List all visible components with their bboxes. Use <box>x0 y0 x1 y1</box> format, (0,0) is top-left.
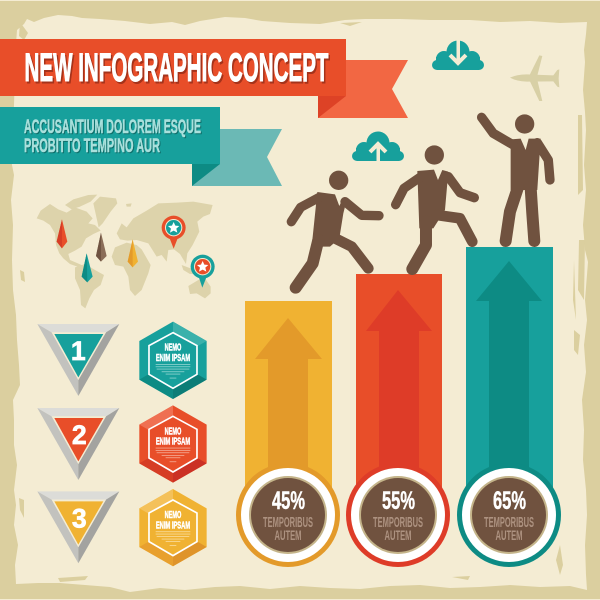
percent circle 65% <box>457 463 561 567</box>
hexagon card 2: NEMO <box>165 426 182 437</box>
hexagon card 2 <box>139 405 207 483</box>
percent circle 45%: AUTEM <box>274 528 302 543</box>
arctic islands <box>65 195 97 209</box>
bar 55% <box>356 274 442 504</box>
icon: airplane <box>510 55 559 101</box>
triangle badge 3 <box>37 491 119 563</box>
australia <box>188 278 211 298</box>
percent circle 65%: TEMPORIBUS <box>484 515 534 531</box>
bar 65% <box>466 247 553 502</box>
percent circle 45% <box>236 463 340 567</box>
icon: teal gem marker <box>82 253 93 282</box>
hexagon card 2: ENIM IPSAM <box>156 437 190 448</box>
icon: yellow gem marker <box>128 239 138 267</box>
percent circle 45%: 45% <box>272 487 305 515</box>
percent circle 45%: TEMPORIBUS <box>263 515 313 531</box>
bar 45% <box>245 301 332 501</box>
percent circle 55%: 55% <box>382 487 415 515</box>
percent circle 55% <box>346 463 450 567</box>
africa <box>112 243 151 296</box>
hexagon card 3: ENIM IPSAM <box>156 520 190 531</box>
hexagon card 1: ENIM IPSAM <box>156 353 190 364</box>
icon: red gem marker <box>57 219 67 248</box>
world map <box>37 195 213 308</box>
percent circle 55%: TEMPORIBUS <box>373 515 423 531</box>
icon: brown gem marker <box>96 233 107 262</box>
icon: download cloud <box>432 40 484 70</box>
title: NEW INFOGRAPHIC CONCEPT <box>24 46 328 90</box>
triangle badge 1 <box>37 324 119 396</box>
subtitle text: ACCUSANTIUM DOLOREM ESQUE <box>24 116 201 138</box>
icon: upload cloud <box>352 132 404 161</box>
triangle badge 3: 3 <box>72 503 87 533</box>
triangle badge 2: 2 <box>72 420 87 450</box>
north america <box>37 204 101 267</box>
icon: teal location pin <box>191 255 215 288</box>
percent circle 65%: AUTEM <box>496 528 522 543</box>
greenland <box>93 197 117 227</box>
subtitle text <box>24 116 202 158</box>
subtitle ribbon <box>0 107 282 186</box>
percent circle 65%: 65% <box>493 487 526 515</box>
figure 3 <box>482 114 550 241</box>
map pins <box>57 216 215 288</box>
title <box>24 46 330 92</box>
title: NEW INFOGRAPHIC CONCEPT <box>26 48 330 92</box>
percent circle 55%: AUTEM <box>384 528 412 543</box>
iceland and islands <box>126 203 132 207</box>
icon: red location pin <box>162 216 186 249</box>
hexagon card 3 <box>139 489 207 566</box>
triangle badge 2 <box>37 408 119 480</box>
subtitle text: ACCUSANTIUM DOLOREM ESQUE <box>25 117 202 139</box>
title ribbon <box>0 39 408 118</box>
subtitle text: PROBITTO TEMPINO AUR <box>25 136 161 158</box>
triangle badge 1: 1 <box>71 336 86 366</box>
south east asia <box>182 265 203 274</box>
hexagon card 1: NEMO <box>165 343 182 354</box>
hexagon card 3: NEMO <box>165 510 182 521</box>
figure 1 <box>291 171 379 288</box>
south america <box>75 264 104 308</box>
figure 2 <box>396 145 474 269</box>
hexagon card 1 <box>139 322 207 399</box>
eurasia <box>117 202 213 264</box>
subtitle text: PROBITTO TEMPINO AUR <box>24 135 160 157</box>
